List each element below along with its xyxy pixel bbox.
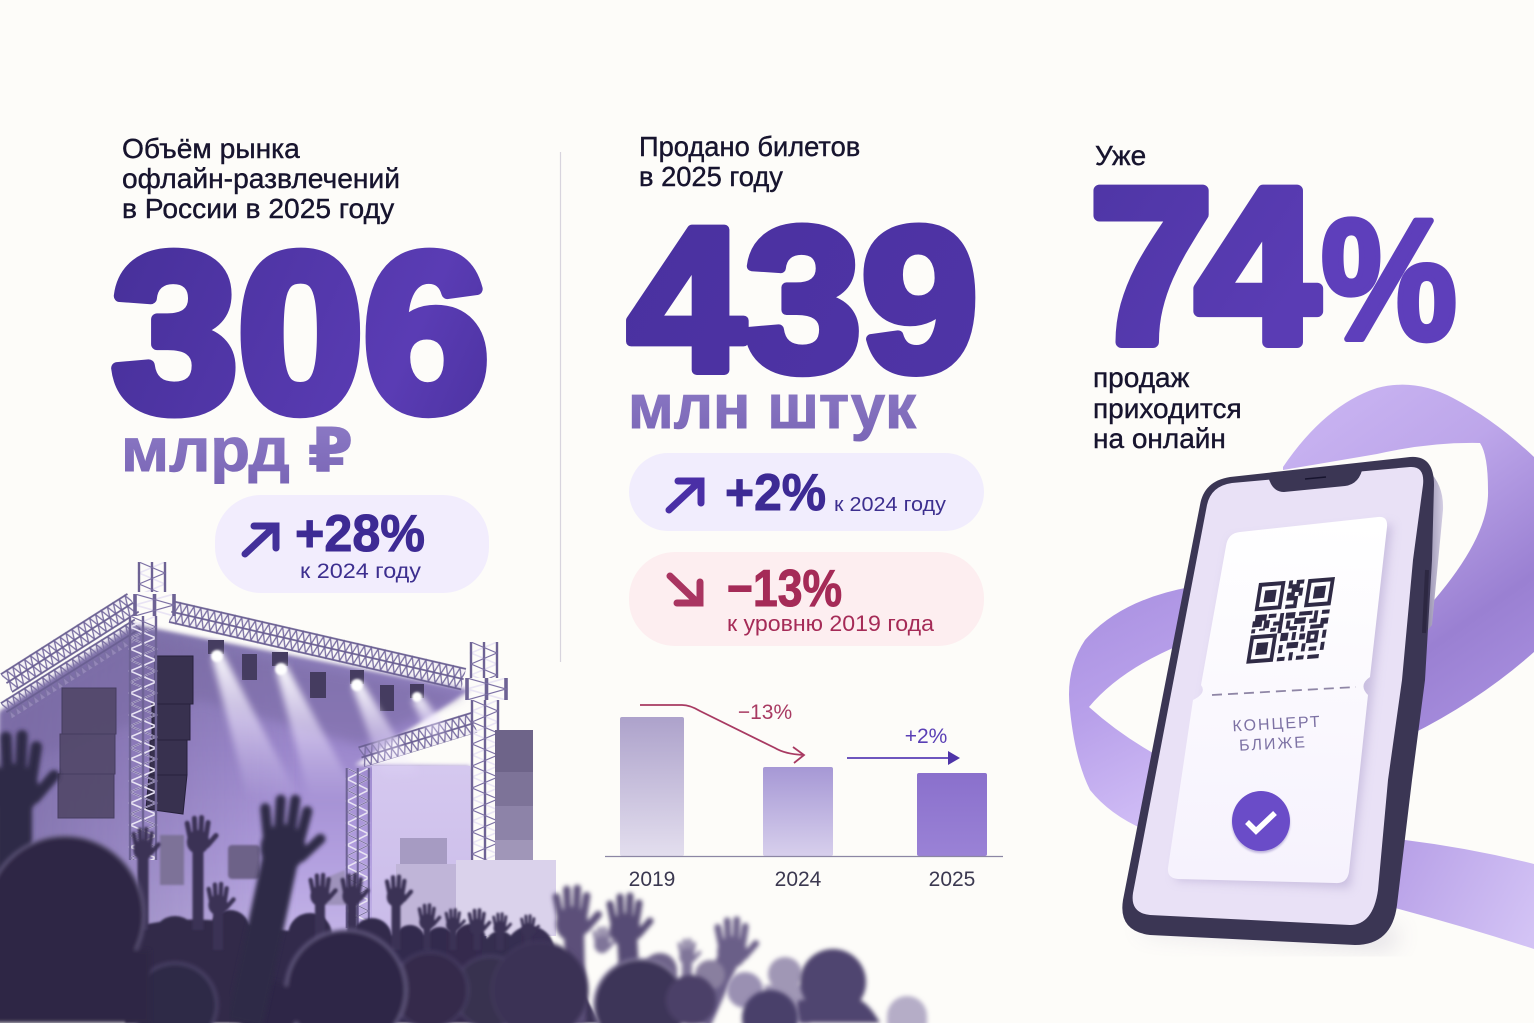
year labels: 2019 [629, 868, 675, 891]
speaker stack left [58, 688, 116, 818]
decline pill -13%: к уровню 2019 года [727, 611, 935, 636]
bar 2019 [620, 717, 684, 856]
growth pill +2%: +2% [725, 464, 826, 522]
growth pill +2%: к 2024 году [834, 494, 946, 516]
year labels: 2025 [929, 868, 975, 891]
icon: arrow down [670, 576, 700, 603]
heading: market volume: Объём рынка [122, 132, 300, 164]
icon: check badge [1232, 791, 1290, 853]
light heads right [643, 953, 927, 1023]
stage haze [0, 625, 470, 960]
unit: billion rubles: млрд ₽ [121, 416, 353, 484]
phone notch [1268, 466, 1363, 492]
rear truss [358, 712, 477, 767]
phone shadow [1140, 920, 1400, 948]
year labels: 2024 [775, 868, 822, 891]
heading: tickets sold: в 2025 году [639, 161, 783, 192]
big number 439: 439 [628, 186, 978, 414]
stage gear [160, 835, 348, 905]
stage cabinets [396, 838, 556, 936]
label: +2%: +2% [905, 725, 947, 748]
phone [1122, 457, 1443, 948]
label: -13%: −13% [738, 701, 792, 724]
big number 306: 306 [112, 208, 489, 458]
phone screen [1133, 467, 1423, 925]
backdrop screen [372, 766, 470, 946]
unit: million pieces: млн штук [628, 373, 917, 442]
phone body [1122, 457, 1434, 945]
big number 74: 74 [1090, 143, 1318, 389]
caption: приходится [1093, 393, 1242, 424]
ticket text: КОНЦЕРТ [1232, 714, 1322, 735]
speaker slit [1305, 477, 1326, 479]
truss tower middle [345, 768, 370, 928]
large hand centre [245, 797, 324, 1023]
speaker stack right [495, 730, 533, 870]
foreground heads [133, 930, 798, 1023]
background heads [125, 910, 600, 1023]
qr code [1246, 577, 1335, 664]
raised hands mid row [134, 818, 538, 950]
decline pill -13%: −13% [727, 560, 842, 618]
side button [1424, 570, 1427, 633]
heading: market volume: в России в 2025 году [122, 192, 395, 224]
roof truss left lower [0, 618, 145, 719]
ribbon [1069, 385, 1534, 949]
illustration: concert stage and crowd [0, 562, 927, 1023]
panel: online share [1069, 140, 1534, 949]
tear line [1212, 687, 1356, 695]
hanging line array [146, 656, 193, 814]
percent sign: % [1321, 184, 1457, 376]
icon: arrow up [245, 526, 276, 554]
bar chart [605, 701, 1003, 891]
ticket [1168, 517, 1387, 883]
arrowhead: growth [948, 751, 960, 765]
light beams [212, 652, 448, 800]
crowd [0, 736, 927, 1023]
heading: already: Уже [1095, 140, 1146, 171]
growth pill +28% [215, 495, 489, 593]
caption: на онлайн [1093, 423, 1226, 454]
icon: arrow up [669, 481, 701, 510]
large hand left [0, 736, 54, 900]
light fixtures [208, 640, 424, 711]
heading: tickets sold: Продано билетов [639, 131, 860, 162]
roof truss right [169, 600, 466, 691]
panel: tickets sold [605, 131, 1003, 891]
growth pill +28%: к 2024 году [300, 560, 422, 583]
stage left shade [0, 625, 300, 960]
decline pill -13% [629, 552, 984, 646]
stage ceiling shade [0, 635, 465, 770]
truss tower left [128, 562, 177, 860]
bar 2024 [763, 767, 833, 856]
ticket text line 2: БЛИЖЕ [1239, 734, 1307, 755]
column divider [560, 152, 562, 662]
lamp glow [211, 650, 422, 702]
arrow: decline [640, 705, 804, 763]
heading: market volume: офлайн-развлечений [122, 162, 400, 194]
truss tower right [464, 642, 509, 940]
growth pill +2% [629, 453, 984, 531]
growth pill +28%: +28% [295, 505, 425, 563]
caption: продаж [1093, 362, 1190, 393]
raised hands right [556, 888, 756, 1023]
arrow: growth [847, 757, 950, 759]
large head right [798, 949, 880, 1023]
panel: market volume [112, 132, 489, 593]
roof truss left upper [0, 593, 140, 693]
phone side glass [1420, 470, 1443, 640]
ticket shadow [1175, 524, 1392, 888]
large head left [0, 836, 150, 1023]
bar 2025 [917, 773, 987, 856]
